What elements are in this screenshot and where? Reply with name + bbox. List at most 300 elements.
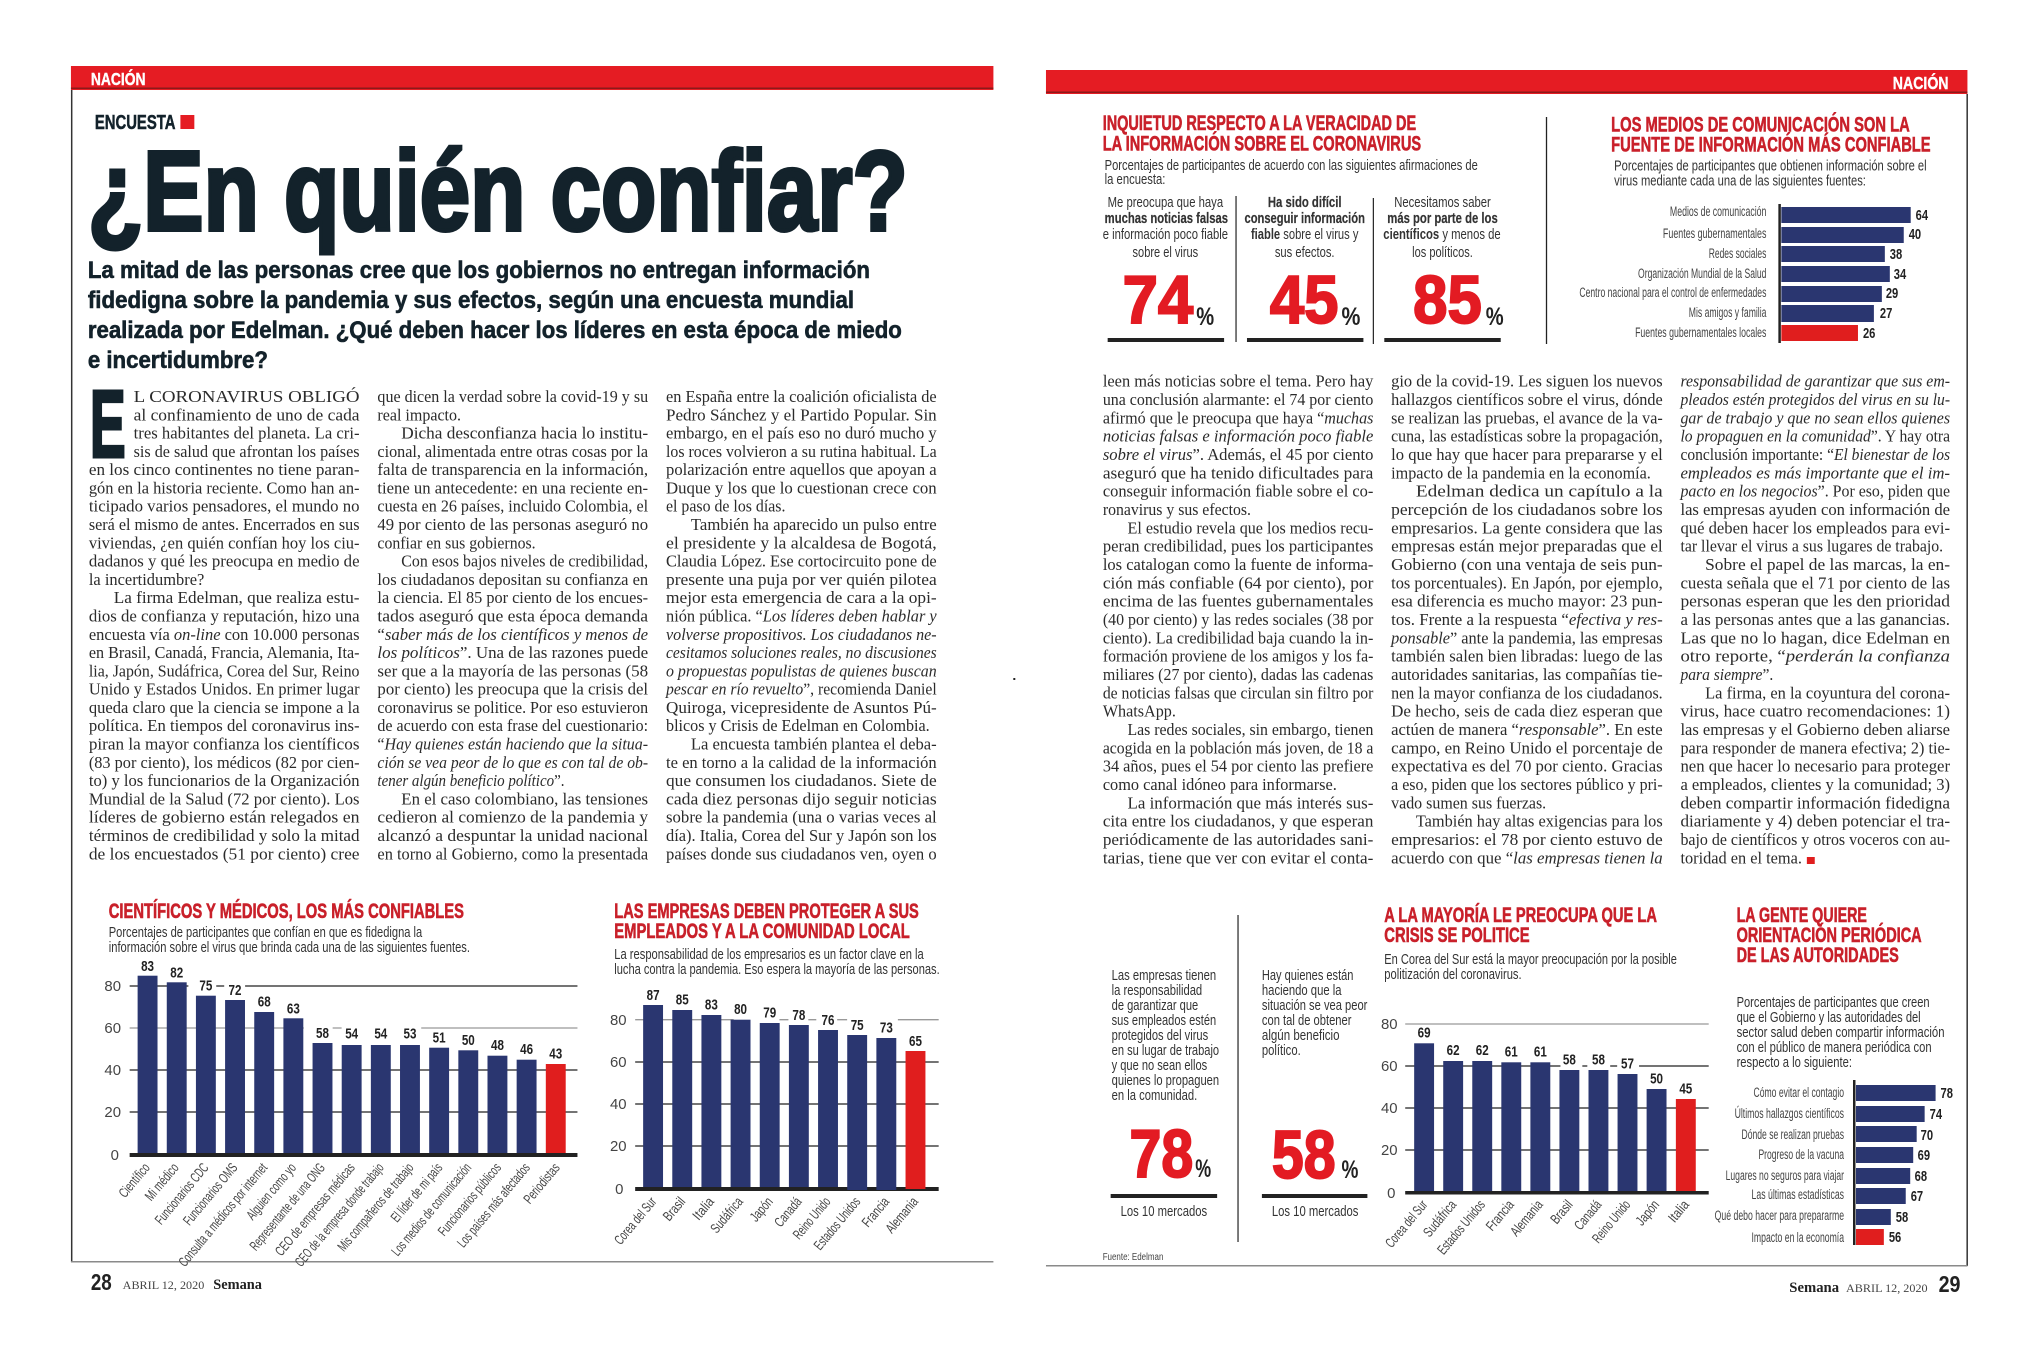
heading: la gente quiere: ORIENTACIÓN PERIÓDICA xyxy=(1737,923,1922,947)
body column 3 left page: Claudia López. Ese cortocircuito pone de xyxy=(666,552,937,571)
bar chart: por país xyxy=(610,987,939,1253)
heading: las empresas xyxy=(614,900,919,943)
bar chart: fuentes confiables: 53 xyxy=(404,1026,416,1043)
horizontal bar chart: fuentes: Centro nacional para el control de enfermedades xyxy=(1579,284,1766,300)
footer left: folio 28 xyxy=(91,1269,263,1295)
body column 2 left page: coronavirus se politice. Por eso estuvieron xyxy=(377,698,649,717)
stat: 74%: Me preocupa que haya xyxy=(1108,194,1224,211)
body column 3 left page: volverse propositivos. Los ciudadanos ne- xyxy=(666,625,937,644)
body column 2 right page: impacto de la pandemia en la economía. xyxy=(1391,463,1651,482)
body column 2 right page: empresas están mejor preparadas que el xyxy=(1391,537,1663,556)
body column 3 right page: responsabilidad de garantizar que sus em- xyxy=(1680,372,1950,391)
intro text: la gente quiere: Porcentajes de participantes que creen xyxy=(1737,994,1930,1011)
horizontal bar chart: fuentes: Fuentes gubernamentales locales xyxy=(1635,324,1766,340)
bar chart: por país: 20 xyxy=(610,1138,627,1155)
stat panel: 58% los 10 mercados: % xyxy=(1342,1156,1358,1184)
body column 2 left page: en torno al Gobierno, como la presentada xyxy=(377,844,649,863)
horizontal bar chart: temas: Impacto en la economía xyxy=(1751,1229,1844,1245)
body column 2 right page: También hay altas exigencias para los xyxy=(1416,812,1663,831)
body column 1 right page: periódicamente de las autoridades sani- xyxy=(1103,830,1374,849)
stat: 85%: más por parte de los xyxy=(1387,210,1498,227)
body column 1 right page: conseguir información fiable sobre el co- xyxy=(1103,482,1374,501)
bar chart: fuentes confiables: CEO de la empresa donde trabajo xyxy=(291,1160,387,1270)
stat: 74%: e información poco fiable xyxy=(1103,226,1228,243)
body column 3 right page: pacto en los negocios”. Por eso, piden que xyxy=(1680,482,1950,501)
horizontal bar chart: temas: 56 xyxy=(1889,1229,1901,1246)
body column 2 right page: autoridades sanitarias, las compañías tie- xyxy=(1391,665,1663,684)
bar chart: fuentes confiables: Periodistas xyxy=(520,1160,563,1207)
body column 2 right page: empresarios. La gente considera que las xyxy=(1391,518,1663,537)
bar chart: politización por país: 40 xyxy=(1381,1100,1398,1117)
intro text: científicos y médicos xyxy=(109,924,470,956)
body column 1 left page: en Brasil, Canadá, Francia, Alemania, Ita- xyxy=(89,643,360,662)
section header bar left: Nación: NACIÓN xyxy=(91,68,146,89)
body column 3 left page: sobre la pandemia (una o varias veces al xyxy=(666,808,937,827)
bar chart: fuentes confiables: 80 xyxy=(104,978,121,995)
body column 3 right page: cuesta señala que el 71 por ciento de las xyxy=(1680,573,1950,592)
bar chart: por país: 76 xyxy=(822,1012,834,1029)
body column 2 left page: “Hay quienes están haciendo que la situa- xyxy=(377,734,648,754)
body column 1 right page: El estudio revela que los medios recu- xyxy=(1128,518,1374,537)
bar chart: politización por país xyxy=(1381,1016,1709,1257)
body column 2 left page: ción se vea peor de lo que es con tal de ob- xyxy=(377,753,648,772)
body column 3 right page: las empresas ayuden con información de xyxy=(1680,500,1950,519)
body column 3 left page: presente una puja por ver quién pilotea xyxy=(666,570,937,589)
heading: inquietud: INQUIETUD RESPECTO A LA VERACIDAD DE xyxy=(1103,112,1416,135)
bar chart: politización por país: 62 xyxy=(1476,1042,1489,1059)
stat panel: 78% los 10 mercados xyxy=(1111,967,1219,1220)
intro text: las empresas: La responsabilidad de los empresarios es un factor clave en la xyxy=(614,946,924,963)
section header bar left: Nación xyxy=(71,66,993,90)
body column 3 left page: Quiroga, vicepresidente de Asuntos Pú- xyxy=(666,698,937,717)
horizontal bar chart: temas: 70 xyxy=(1921,1127,1933,1144)
body column 2 left page: los ciudadanos depositan su confianza en xyxy=(377,570,649,589)
horizontal bar chart: fuentes: 38 xyxy=(1890,246,1902,263)
horizontal bar chart: temas: Progreso de la vacuna xyxy=(1758,1146,1844,1162)
body column 1 right page: sobre el virus”. Además, el 45 por ciento xyxy=(1103,445,1373,464)
bar chart: fuentes confiables: Funcionarios públicos xyxy=(434,1160,504,1239)
body column 3 right page: virus, hace cuatro recomendaciones: 1) xyxy=(1680,702,1950,721)
bar chart: politización por país: Japón xyxy=(1632,1197,1662,1228)
bar chart: por país: 0 xyxy=(615,1181,623,1198)
body column 2 right page: también salen bien libradas: luego de las xyxy=(1391,647,1663,666)
bar chart: fuentes confiables: Consulta a médicos por internet xyxy=(175,1160,270,1270)
heading: a la mayoría: A LA MAYORÍA LE PREOCUPA QUE LA xyxy=(1384,904,1657,927)
bar chart: politización por país: 62 xyxy=(1447,1042,1460,1059)
heading: la gente quiere: DE LAS AUTORIDADES xyxy=(1737,944,1899,967)
text: las empresas tienen la responsabilidad: Las empresas tienen xyxy=(1112,967,1216,984)
body column 2 right page: se realizan las pruebas, el avance de la va- xyxy=(1391,408,1663,427)
right page body text xyxy=(1103,372,1951,867)
intro text: las empresas: lucha contra la pandemia. Eso espera la mayoría de las personas. xyxy=(614,961,940,978)
intro text: los medios xyxy=(1614,158,1927,190)
panel: los medios de comunicación xyxy=(1579,113,1931,343)
bar chart: fuentes confiables: 40 xyxy=(104,1062,121,1079)
body column 2 right page: Edelman dedica un capítulo a la xyxy=(1416,482,1663,501)
heading: los medios xyxy=(1611,113,1931,157)
body column 3 right page: Sobre el papel de las marcas, la en- xyxy=(1705,555,1950,574)
body column 3 right page: nen que hacer lo necesario para proteger xyxy=(1680,757,1950,776)
body column 2 left page: por ciento) les preocupa que la crisis del xyxy=(377,680,648,699)
body column 3 right page: qué deben hacer los empleados para evi- xyxy=(1680,518,1950,537)
bar chart: fuentes confiables xyxy=(104,958,577,1270)
body column 1 right page: (40 por ciento) y las redes sociales (38 por xyxy=(1103,610,1374,629)
bar chart: fuentes confiables: 48 xyxy=(491,1037,504,1054)
body column 3 right page: las empresas y el Gobierno deben aliarse xyxy=(1680,720,1950,739)
intro text: inquietud: Porcentajes de participantes de acuerdo con las siguientes afirmaciones de xyxy=(1105,157,1478,174)
title: ¿En quién confiar? xyxy=(88,128,908,254)
kicker: Encuesta: ENCUESTA xyxy=(95,112,175,134)
body column 2 right page: tos porcentuales). En Japón, por ejemplo, xyxy=(1391,573,1663,592)
body column 1 right page: de noticias falsas que circulan sin filtro por xyxy=(1103,683,1374,702)
body column 1 left page: la incertidumbre? xyxy=(89,570,204,589)
body column 3 right page: a empleados, clientes y la comunidad; 3) xyxy=(1680,775,1950,794)
horizontal bar chart: fuentes xyxy=(1579,203,1929,343)
body column 1 left page: política. En tiempos del coronavirus ins- xyxy=(89,716,360,735)
text: las empresas tienen la responsabilidad: sus empleados estén xyxy=(1112,1012,1216,1029)
body column 2 left page: tener algún beneficio político”. xyxy=(377,771,565,790)
intro text: las empresas xyxy=(614,946,940,978)
bar chart: por país: 75 xyxy=(851,1017,864,1034)
horizontal bar chart: temas: 69 xyxy=(1918,1147,1930,1164)
heading: a la mayoría xyxy=(1384,904,1657,947)
body column 1 right page: como canal idóneo para informarse. xyxy=(1103,775,1337,794)
heading: científicos y médicos: CIENTÍFICOS Y MÉDICOS, LOS MÁS CONFIABLES xyxy=(109,900,464,923)
body column 2 right page: tos. Frente a la respuesta “efectiva y res- xyxy=(1391,610,1663,629)
text: las empresas tienen la responsabilidad: y que no sean ellos xyxy=(1112,1057,1207,1074)
horizontal bar chart: temas: 78 xyxy=(1941,1085,1953,1102)
body column 1 right page: ción más confiable (64 por ciento), por xyxy=(1103,573,1374,592)
bar chart: por país: Reino Unido xyxy=(789,1194,834,1242)
horizontal bar chart: fuentes: 29 xyxy=(1886,285,1898,302)
bar chart: fuentes confiables: Representante de una ONG xyxy=(246,1160,328,1253)
footer left: folio 28: 28 xyxy=(91,1269,112,1295)
stat: 85%: 85 xyxy=(1413,263,1482,338)
bar chart: fuentes confiables: 60 xyxy=(104,1020,121,1037)
body column 1 right page: WhatsApp. xyxy=(1103,702,1176,721)
horizontal bar chart: fuentes: 64 xyxy=(1916,207,1929,224)
horizontal bar chart: temas: 74 xyxy=(1930,1106,1943,1123)
bar chart: por país: 78 xyxy=(792,1007,805,1024)
bar chart: por país: Sudáfrica xyxy=(707,1193,746,1236)
right page frame xyxy=(1046,94,1968,1266)
horizontal bar chart: temas: 68 xyxy=(1915,1168,1927,1185)
body column 1 left page xyxy=(89,387,360,863)
bar chart: politización por país: 0 xyxy=(1387,1185,1395,1202)
body column 3 left page: o propuestas populistas de quienes buscan xyxy=(666,661,937,680)
bar chart: fuentes confiables: El líder de mi país xyxy=(387,1160,445,1225)
text: las empresas tienen la responsabilidad: quienes lo propaguen xyxy=(1112,1072,1219,1089)
body column 3 left page: cada diez personas dijo seguir noticias xyxy=(666,789,937,808)
source note: Fuente: Edelman xyxy=(1103,1252,1164,1263)
intro text: los medios: virus mediante cada una de las siguientes fuentes: xyxy=(1614,173,1866,190)
body column 2 left page: En el caso colombiano, las tensiones xyxy=(401,789,648,808)
text: hay quienes están haciendo: con tal de obtener xyxy=(1262,1012,1351,1029)
body column 1 left page: términos de credibilidad y solo la mitad xyxy=(89,826,360,845)
bar chart: fuentes confiables: 63 xyxy=(287,1000,300,1017)
body column 1 right page: acogida en la población más joven, de 18 a xyxy=(1103,738,1374,757)
text: las empresas tienen la responsabilidad: protegidos del virus xyxy=(1112,1027,1208,1044)
body column 1 left page: lia, Japón, Sudáfrica, Corea del Sur, Reino xyxy=(89,661,360,680)
body column 3 left page: Duque y los que lo cuestionan crece con xyxy=(666,478,937,498)
body column 1 left page: dios de confianza y reputación, hizo una xyxy=(89,606,360,626)
bar chart: fuentes confiables: Funcionarios CDC xyxy=(151,1160,212,1227)
body column 2 left page: cedieron al comienzo de la pandemia y xyxy=(377,808,649,827)
stat panel: 78% los 10 mercados: Los 10 mercados xyxy=(1121,1203,1207,1220)
body column 3 left page: polarización entre aquellos que apoyan a xyxy=(666,460,937,479)
body column 2 left page: tados aseguró que esta época demanda xyxy=(377,606,649,626)
bar chart: politización por país: 58 xyxy=(1563,1051,1576,1068)
horizontal bar chart: temas: Qué debo hacer para prepararme xyxy=(1715,1207,1844,1223)
bar chart: por país: 83 xyxy=(705,996,718,1013)
panel: inquietud respecto a la veracidad xyxy=(1103,112,1504,344)
body column 2 right page: ponsable” ante la pandemia, las empresas xyxy=(1390,628,1663,647)
bar chart: politización por país: 20 xyxy=(1381,1142,1398,1159)
stat: 85%: Necesitamos saber xyxy=(1394,194,1491,211)
body column 3 left page: países donde sus ciudadanos ven, oyen o xyxy=(666,844,937,863)
bar chart: por país: Francia xyxy=(858,1193,892,1230)
horizontal bar chart: temas xyxy=(1715,1080,1953,1246)
bar chart: por país: 85 xyxy=(676,991,689,1008)
body column 1 left page: Unido y Estados Unidos. En primer lugar xyxy=(89,680,360,699)
body column 1 left page: en los cinco continentes no tiene paran- xyxy=(89,460,360,479)
body column 1 left page: (83 por ciento), los médicos (82 por cien- xyxy=(89,753,360,772)
body column 2 left page: “saber más de los científicos y menos de xyxy=(377,625,649,644)
horizontal bar chart: fuentes: 26 xyxy=(1863,325,1875,342)
deck paragraph: realizada por Edelman. ¿Qué deben hacer los líderes en esta época de miedo xyxy=(88,317,902,344)
stat: 74%: sobre el virus xyxy=(1133,244,1198,261)
body column 3 right page: lo propaguen en la comunidad”. Y hay otra xyxy=(1680,427,1950,446)
body column 3 left page: embargo, en el país eso no duró mucho y xyxy=(666,424,937,443)
text: las empresas tienen la responsabilidad: en la comunidad. xyxy=(1112,1087,1197,1104)
intro text: inquietud xyxy=(1105,157,1478,188)
body column 1 right page: 34 años, pues el 54 por ciento las prefiere xyxy=(1103,757,1373,776)
bar chart: fuentes confiables: Mi médico xyxy=(141,1160,182,1204)
bar chart: por país: Italia xyxy=(689,1193,717,1223)
body column 1 left page: sis de salud que afrontan los países xyxy=(134,442,360,461)
body column 1 right page: Las redes sociales, sin embargo, tienen xyxy=(1128,720,1374,739)
body column 2 left page: los políticos”. Una de las razones puede xyxy=(377,643,648,662)
body column 3 right page: tar llevar el virus a sus lugares de trabajo. xyxy=(1680,537,1943,556)
body column 3 left page: cesitamos soluciones reales, no discusiones xyxy=(666,643,937,662)
body column 1 left page: L CORONAVIRUS OBLIGÓ xyxy=(134,387,360,406)
stat: 45%: Ha sido difícil xyxy=(1268,194,1342,211)
body column 1 left page: La firma Edelman, que realiza estu- xyxy=(114,588,360,607)
body column 1 left page: ticipado varios pensadores, el mundo no xyxy=(89,497,360,516)
horizontal bar chart: fuentes: 40 xyxy=(1909,226,1921,243)
horizontal bar chart: fuentes: 34 xyxy=(1894,266,1907,283)
bar chart: politización por país: 57 xyxy=(1621,1055,1634,1072)
text: las empresas tienen la responsabilidad: de garantizar que xyxy=(1112,997,1198,1014)
intro text: científicos y médicos: Porcentajes de participantes que confían en que es fidedigna la xyxy=(109,924,423,941)
bar chart: politización por país: 60 xyxy=(1381,1058,1398,1075)
bar chart: politización por país: 61 xyxy=(1534,1044,1547,1061)
body column 1 right page: La información que más interés sus- xyxy=(1128,793,1374,812)
text: hay quienes están haciendo: político. xyxy=(1262,1042,1301,1059)
intro text: a la mayoría: En Corea del Sur está la mayor preocupación por la posible xyxy=(1384,951,1677,968)
left page xyxy=(71,66,1015,1295)
deck paragraph xyxy=(88,257,902,374)
body column 2 right page: hallazgos científicos sobre el virus, dónde xyxy=(1391,390,1663,409)
footer left: folio 28: Semana xyxy=(213,1277,263,1293)
horizontal bar chart: temas: Cómo evitar el contagio xyxy=(1753,1084,1844,1100)
chart panel: las empresas xyxy=(610,900,940,1253)
body column 1 left page: Mundial de la Salud (72 por ciento). Los xyxy=(89,789,360,808)
bar chart: politización por país: 80 xyxy=(1381,1016,1398,1033)
body column 1 right page: formación proviene de los amigos y los fa- xyxy=(1103,647,1374,666)
body column 1 right page: encima de las fuentes gubernamentales xyxy=(1103,592,1373,611)
body column 2 right page: campo, en Reino Unido el porcentaje de xyxy=(1391,738,1663,757)
text: las empresas tienen la responsabilidad xyxy=(1112,967,1219,1104)
body column 1 left page: tres habitantes del planeta. La cri- xyxy=(134,424,360,443)
body column 1 right page: tarias, tiene que ver con evitar el conta- xyxy=(1103,848,1374,867)
horizontal bar chart: fuentes: Organización Mundial de la Salud xyxy=(1638,265,1766,281)
body column 2 left page: la ciencia. El 85 por ciento de los encues- xyxy=(377,588,648,607)
body column 2 right page xyxy=(1390,372,1663,867)
body column 3 left page: mejor esta emergencia de cara a la opi- xyxy=(666,588,937,607)
deck paragraph: fidedigna sobre la pandemia y sus efectos, según una encuesta mundial xyxy=(88,287,854,314)
chart panel: crisis se politice xyxy=(1381,904,1709,1257)
body column 2 right page: actúen de manera “responsable”. En este xyxy=(1391,720,1663,739)
text: hay quienes están haciendo: Hay quienes están xyxy=(1262,967,1353,984)
bar chart: politización por país: Reino Unido xyxy=(1589,1197,1633,1246)
bar chart: politización por país: 61 xyxy=(1505,1044,1518,1061)
body column 1 left page: será el mismo de antes. Encerrados en sus xyxy=(89,515,360,534)
body column 2 right page: De hecho, seis de cada diez esperan que xyxy=(1391,702,1663,721)
stat panel: 58% los 10 mercados xyxy=(1262,967,1367,1220)
bar chart: politización por país: Alemania xyxy=(1507,1196,1546,1239)
body column 2 left page: 49 por ciento de las personas aseguró no xyxy=(377,515,648,534)
bar chart: politización por país: Brasil xyxy=(1547,1197,1576,1227)
bar chart: por país: Corea del Sur xyxy=(611,1193,660,1248)
heading: inquietud xyxy=(1103,112,1421,156)
horizontal bar chart: temas: Lugares no seguros para viajar xyxy=(1726,1167,1844,1183)
body column 2 left page: real impacto. xyxy=(377,405,461,424)
body column 2 right page: percepción de los ciudadanos sobre los xyxy=(1391,500,1663,519)
stat: 85%: los políticos. xyxy=(1412,244,1473,261)
body column 3 left page: También ha aparecido un pulso entre xyxy=(691,515,937,534)
stat panel: 58% los 10 mercados: Los 10 mercados xyxy=(1272,1203,1358,1220)
body column 1 right page: ciento). La credibilidad baja cuando la in- xyxy=(1103,628,1374,647)
text: las empresas tienen la responsabilidad: la responsabilidad xyxy=(1112,982,1202,999)
body column 1 left page: piran la mayor confianza los científicos xyxy=(89,734,360,754)
body column 3 right page: pleados estén protegidos del virus en su lu- xyxy=(1680,390,1950,409)
body column 1 right page: aseguró que ha tenido dificultades para xyxy=(1103,463,1374,482)
footer right: folio 29 xyxy=(1789,1271,1960,1297)
stat panel: 78% los 10 mercados: 78 xyxy=(1130,1117,1193,1192)
body column 2 right page: expectativa es del 70 por ciento. Gracias xyxy=(1391,757,1663,776)
bar chart: por país: 80 xyxy=(610,1012,627,1029)
stat: 85%: % xyxy=(1486,303,1504,331)
body column 1 right page: noticias falsas e información poco fiable xyxy=(1103,427,1374,446)
intro text: la gente quiere xyxy=(1737,994,1945,1071)
bar chart: politización por país: 45 xyxy=(1679,1080,1692,1097)
body column 2 right page: Gobierno (con una ventaja de seis pun- xyxy=(1391,555,1663,574)
bar chart: fuentes confiables: CEO de empresas médicas xyxy=(271,1160,358,1259)
bar chart: fuentes confiables: 72 xyxy=(229,982,242,999)
body column 3 right page: otro reporte, “ perderán la confianza xyxy=(1680,647,1950,666)
bar chart: politización por país: Francia xyxy=(1482,1196,1517,1234)
body column 3 right page xyxy=(1680,372,1951,867)
bar chart: por país: Alemania xyxy=(882,1193,921,1236)
bar chart: fuentes confiables: 54 xyxy=(374,1026,388,1043)
bar chart: fuentes confiables: Los países más afectados xyxy=(454,1160,533,1250)
bar chart: fuentes confiables: Funcionarios OMS xyxy=(180,1160,240,1228)
intro text: la gente quiere: con el público de manera periódica con xyxy=(1737,1039,1932,1056)
body column 1 right page: cita entre los ciudadanos, y que esperan xyxy=(1103,812,1374,831)
stat: 45% xyxy=(1244,194,1365,342)
body column 3 right page: personas esperan que les den prioridad xyxy=(1680,592,1951,611)
horizontal bar chart: temas: Dónde se realizan pruebas xyxy=(1742,1126,1844,1142)
bar chart: politización por país: Estados Unidos xyxy=(1434,1197,1488,1257)
chart panel: científicos y médicos xyxy=(104,900,577,1270)
bar chart: por país: 80 xyxy=(734,1001,747,1018)
body column 2 left page: ser que a la mayoría de las personas (58 xyxy=(377,661,648,680)
footer right: folio 29: ABRIL 12, 2020 xyxy=(1846,1283,1928,1295)
body column 3 right page: conclusión importante: “El bienestar de los xyxy=(1680,445,1950,464)
heading: la gente quiere xyxy=(1737,904,1922,967)
body column 2 right page: gio de la covid-19. Les siguen los nuevos xyxy=(1391,372,1663,391)
body column 1 left page: encuesta vía on-line con 10.000 personas xyxy=(89,625,360,644)
section header bar right: Nación xyxy=(1046,70,1967,94)
body column 3 right page: gar de trabajo y que no sean ellos quienes xyxy=(1680,408,1950,427)
intro text: la gente quiere: que el Gobierno y las autoridades del xyxy=(1737,1009,1921,1026)
body column 3 right page: empleados es más importante que el im- xyxy=(1680,463,1950,482)
intro text: la gente quiere: respecto a lo siguiente: xyxy=(1737,1054,1852,1071)
text: las empresas tienen la responsabilidad: en su lugar de trabajo xyxy=(1112,1042,1219,1059)
footer right: folio 29: Semana xyxy=(1789,1280,1840,1296)
body column 3 right page: diariamente y 4) deben potenciar el tra- xyxy=(1680,812,1950,831)
body column 2 right page: nen la mayor confianza de los ciudadanos. xyxy=(1391,683,1663,702)
intro text: científicos y médicos: información sobre el virus que brinda cada una de las siguientes fuentes. xyxy=(109,939,470,956)
body column 1 right page: ronavirus y sus efectos. xyxy=(1103,500,1251,519)
body column 1 left page: líderes de gobierno están relegados en xyxy=(89,808,360,827)
deck paragraph: e incertidumbre? xyxy=(88,347,268,374)
deck paragraph: La mitad de las personas cree que los gobiernos no entregan información xyxy=(88,257,870,284)
bar chart: fuentes confiables: 83 xyxy=(141,958,154,975)
left page frame xyxy=(71,90,993,1262)
horizontal bar chart: fuentes: Medios de comunicación xyxy=(1670,203,1766,219)
body column 2 left page: Con esos bajos niveles de credibilidad, xyxy=(401,552,648,571)
body column 2 left page: tiene un antecedente: en una reciente en- xyxy=(377,478,648,498)
body column 3 left page: Pedro Sánchez y el Partido Popular. Sin xyxy=(666,405,937,424)
body column 2 right page: acuerdo con que “las empresas tienen la xyxy=(1391,848,1663,867)
bar chart: fuentes confiables: Científico xyxy=(115,1160,153,1201)
stat: 85%: científicos y menos de xyxy=(1383,226,1501,243)
body column 3 left page: el presidente y la alcaldesa de Bogotá, xyxy=(666,533,937,552)
body column 3 right page: bajo de científicos y otros voceros con au- xyxy=(1680,830,1950,849)
stat: 45%: sus efectos. xyxy=(1275,244,1335,261)
bar chart: fuentes confiables: 68 xyxy=(258,994,271,1011)
body column 1 right page xyxy=(1103,372,1374,867)
body column 1 left page: to) y los funcionarios de la Organización xyxy=(89,771,360,790)
bar chart: por país: Canadá xyxy=(771,1194,805,1230)
footer left: folio 28: ABRIL 12, 2020 xyxy=(123,1280,205,1292)
text: hay quienes están haciendo: algún beneficio xyxy=(1262,1027,1340,1044)
bar chart: fuentes confiables: 58 xyxy=(316,1025,329,1042)
horizontal bar chart: fuentes: 27 xyxy=(1880,305,1892,322)
bar chart: fuentes confiables: Alguien como yo xyxy=(243,1160,299,1223)
body column 3 left page: en España entre la coalición oficialista de xyxy=(666,387,937,406)
bar chart: fuentes confiables: Los medios de comunicación xyxy=(388,1160,474,1259)
bar chart: fuentes confiables: 54 xyxy=(345,1026,359,1043)
bar chart: fuentes confiables: Mis compañeros de trabajo xyxy=(334,1160,417,1254)
body column 3 left page: los roces volvieron a su rutina habitual. La xyxy=(666,442,937,461)
body column 2 left page: que dicen la verdad sobre la covid-19 y su xyxy=(377,387,649,406)
body column 2 left page: de acuerdo con esta frase del cuestionario: xyxy=(377,716,648,735)
body column 3 right page: La firma, en la coyuntura del corona- xyxy=(1705,683,1950,702)
heading: a la mayoría: CRISIS SE POLITICE xyxy=(1384,924,1530,947)
